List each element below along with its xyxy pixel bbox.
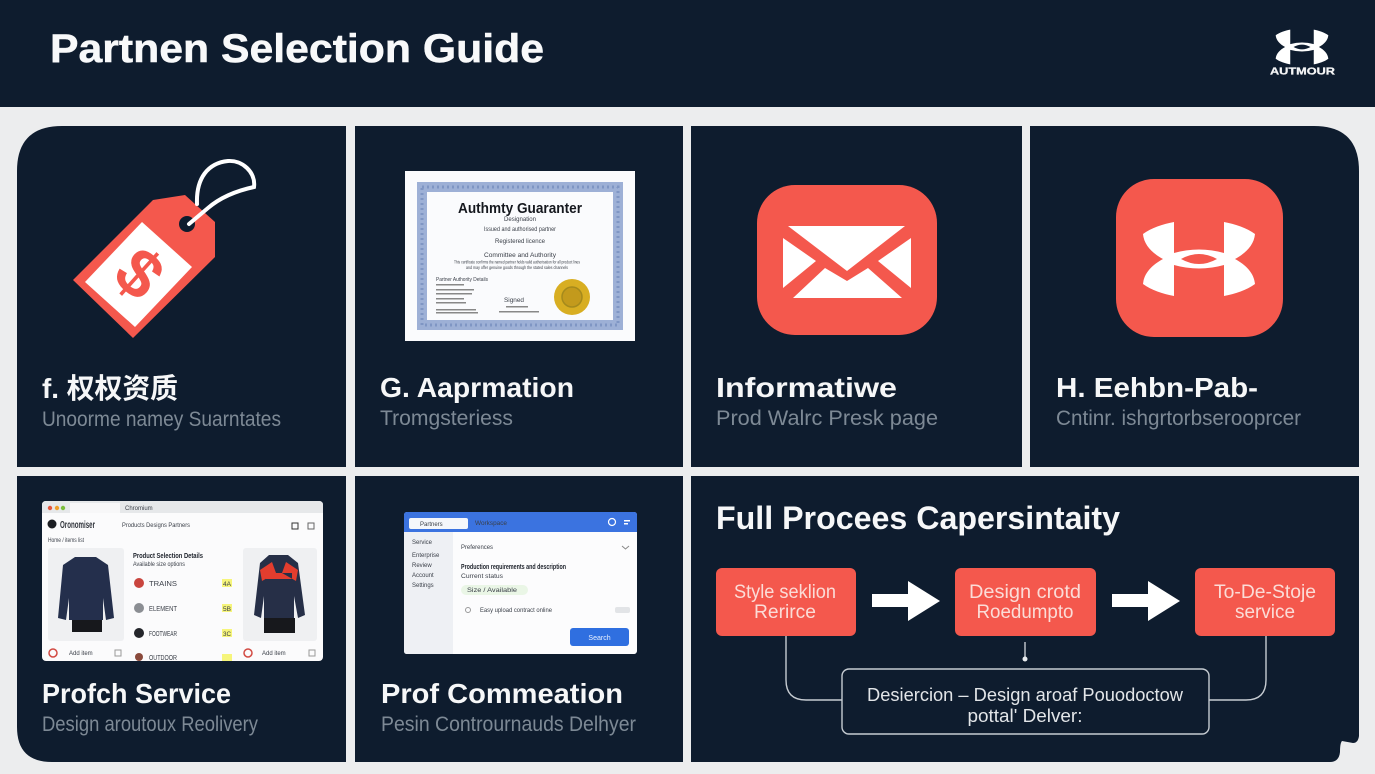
product rows — [134, 578, 232, 662]
settings window screenshot — [404, 512, 637, 654]
product page screenshot — [42, 501, 323, 662]
subtext: Pesin Contrournauds Delhyer — [381, 713, 636, 736]
summary box — [842, 669, 1209, 734]
step: design — [955, 568, 1096, 636]
product rows: FOOTWEAR — [149, 629, 177, 638]
title: Partnen Selection Guide — [50, 27, 544, 71]
certificate image: and may offer genuine goods through the stated sales channels — [466, 265, 569, 270]
heading: H. Eehbn-Pab- — [1056, 372, 1258, 403]
settings window screenshot: Partners — [420, 522, 443, 528]
heading: Profch Service — [42, 678, 231, 709]
subtext: Design aroutoux Reolivery — [42, 713, 258, 736]
panel: product service — [17, 476, 346, 762]
sidebar: Settings — [412, 583, 434, 589]
panel: communication — [355, 476, 683, 762]
product rows: 4A — [223, 582, 231, 588]
certificate image: Issued and authorised partner — [484, 227, 556, 233]
product rows: 5B — [223, 607, 231, 613]
subtext: Tromgsteriess — [380, 407, 513, 430]
icon: price tag — [73, 161, 254, 338]
panel: brand — [1030, 126, 1359, 467]
heading: f. 权权资质 — [42, 373, 178, 404]
button: Search — [588, 635, 611, 642]
heading: Prof Commeation — [381, 678, 623, 709]
arrow — [872, 581, 940, 621]
product page screenshot: Product Selection Details — [133, 553, 203, 560]
subtext: Prod Walrc Presk page — [716, 407, 938, 430]
sidebar: Enterprise — [412, 553, 440, 559]
certificate image: This certificate confirms the named partner holds valid authorisation for all product lines — [454, 260, 581, 264]
product page screenshot: Add item — [69, 651, 93, 657]
sidebar: Service — [412, 540, 433, 546]
connector lines — [786, 636, 1266, 700]
heading: Full Procees Capersintaity — [716, 500, 1120, 536]
settings window screenshot: Size / Available — [467, 588, 518, 594]
certificate image: Authmty Guaranter — [458, 201, 582, 217]
step: to-store service: To-De-Stoje — [1214, 582, 1316, 603]
panel: authenticity certificate — [355, 126, 683, 467]
step: style selection — [716, 568, 856, 636]
certificate image: Signed — [504, 298, 524, 304]
summary box: pottal' Delver: — [968, 706, 1082, 726]
certificate image: Designation — [504, 217, 536, 223]
product page screenshot: Add item — [262, 651, 286, 657]
certificate image: Partner Authority Details — [436, 277, 488, 283]
step: style selection: Rerirce — [754, 602, 816, 623]
certificate image: Registered licence — [495, 239, 546, 245]
panel: full process — [691, 476, 1359, 762]
step: to-store service — [1195, 568, 1335, 636]
icon: price tag: $ — [100, 233, 179, 315]
header band — [0, 0, 1375, 107]
step: style selection: Style seklion — [734, 582, 836, 603]
subtext: Cntinr. ishgrtorbserooprcer — [1056, 407, 1301, 430]
heading: G. Aaprmation — [380, 372, 574, 403]
product rows: OUTDOOR — [149, 653, 177, 662]
settings window screenshot: Workspace — [475, 521, 508, 527]
summary box: Desiercion – Design aroaf Pouodoctow — [867, 685, 1184, 705]
gold seal — [554, 279, 590, 315]
button — [570, 628, 629, 646]
panel: price tag — [17, 126, 346, 467]
step: design: Roedumpto — [976, 602, 1074, 623]
product page screenshot: Home / items list — [48, 538, 84, 544]
brand logo — [1270, 30, 1335, 77]
settings window screenshot: Easy upload contract online — [480, 608, 553, 614]
product page screenshot: Oronomiser — [60, 520, 95, 531]
certificate image: Committee and Authority — [484, 253, 556, 259]
sidebar: Review — [412, 563, 432, 569]
step: to-store service: service — [1235, 602, 1295, 623]
settings window screenshot: Production requirements and description — [461, 564, 566, 571]
product page screenshot: Available size options — [133, 562, 185, 568]
sidebar — [404, 532, 453, 654]
product photo: navy jacket — [48, 548, 124, 641]
icon: brand mark — [1116, 179, 1283, 337]
step: design: Design crotd — [969, 582, 1081, 603]
icon: envelope — [757, 185, 937, 335]
certificate image — [405, 171, 635, 341]
product rows: TRAINS — [149, 579, 177, 588]
brand logo: AUTMOUR — [1270, 66, 1335, 78]
arrow — [1112, 581, 1180, 621]
product rows: 3C — [223, 632, 232, 638]
product page screenshot: Chromium — [125, 506, 153, 512]
panel: information — [691, 126, 1022, 467]
product rows: ELEMENT — [149, 604, 177, 613]
heading: Informatiwe — [716, 372, 897, 403]
product page screenshot: Products Designs Partners — [122, 523, 190, 529]
settings window screenshot: Preferences — [461, 545, 493, 551]
product photo: red and navy jacket — [243, 548, 317, 641]
sidebar: Account — [412, 573, 434, 579]
settings window screenshot: Current status — [461, 574, 503, 580]
subtext: Unoorme namey Suarntates — [42, 408, 281, 431]
